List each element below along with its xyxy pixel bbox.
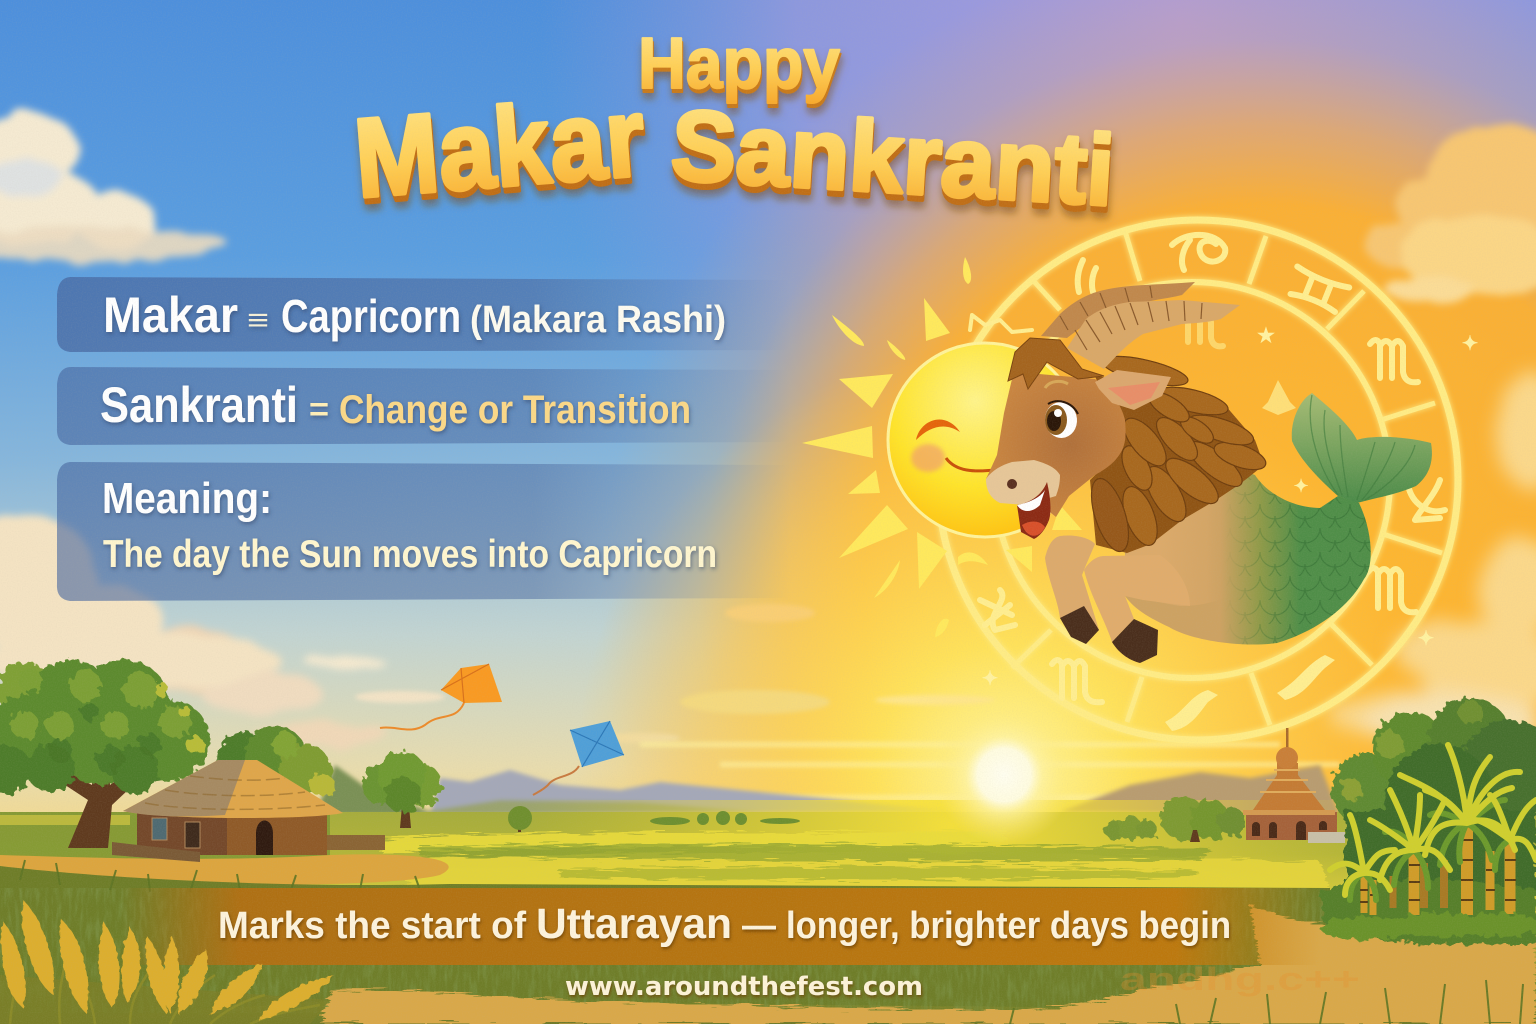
small tree <box>362 751 442 828</box>
title: Makar: Makar <box>350 74 649 221</box>
cane leaves <box>1330 745 1536 895</box>
big tree right <box>1332 698 1536 905</box>
sparkle stars: ★ <box>1257 325 1275 347</box>
panel: Sankranti definition: Change or Transition <box>339 388 691 432</box>
panel: Meaning: Meaning: <box>102 474 272 523</box>
ear <box>1095 370 1171 410</box>
panel: Makar definition: (Makara Rashi) <box>470 299 726 341</box>
clouds: right lower <box>1330 372 1536 746</box>
cheek <box>911 444 945 472</box>
nostril <box>1007 479 1017 489</box>
front leg <box>1084 555 1190 663</box>
kite: orange <box>380 664 502 730</box>
sparkle stars: ✦ <box>1418 628 1434 650</box>
foliage <box>0 660 210 794</box>
panel: Makar definition: Capricorn <box>281 290 461 342</box>
foreground dirt right <box>320 905 1536 1024</box>
zodiac symbols <box>970 235 1445 702</box>
cane joints <box>1360 840 1516 902</box>
sugarcane <box>1320 745 1536 940</box>
banner text: longer, brighter days begin <box>786 905 1231 947</box>
sun on horizon <box>934 705 1074 845</box>
hut fence <box>112 842 200 862</box>
panel: Sankranti definition: = <box>309 391 329 427</box>
panel: Meaning <box>57 462 790 601</box>
cane stalks <box>1364 823 1510 915</box>
dirt path near house <box>0 854 449 885</box>
distant bushes <box>650 811 800 825</box>
banner text: Uttarayan <box>536 900 732 948</box>
sparkle stars: ✦ <box>982 668 998 690</box>
sparkle stars: ✦ <box>1462 333 1478 355</box>
sparkle stars <box>982 325 1478 690</box>
fish tail fin <box>1292 393 1432 503</box>
goat head <box>986 338 1171 539</box>
clouds: left top <box>0 112 230 262</box>
capricorn goat fish <box>986 282 1432 670</box>
hut <box>112 760 385 862</box>
panel: Makar definition: ≡ <box>247 304 269 337</box>
tiny tree <box>508 806 532 832</box>
eye <box>1043 401 1079 439</box>
faint watermark: andhg.c++ <box>1120 961 1360 997</box>
panel: Makar definition: Makar <box>103 287 238 343</box>
temple <box>1243 728 1345 843</box>
title: Sankranti: Sankranti <box>669 95 1118 233</box>
panel: Meaning: The day the Sun moves into Capricorn <box>103 533 717 576</box>
panel: Makar definition <box>57 277 790 352</box>
title <box>350 24 1118 233</box>
grass texture <box>0 888 1340 1013</box>
title: Sankranti: Sankranti <box>668 89 1117 227</box>
grass behind cane <box>1320 878 1536 945</box>
mane <box>1084 350 1269 556</box>
website url: www.aroundthefest.com <box>565 972 923 1002</box>
muzzle <box>986 460 1060 505</box>
bush under cane <box>1320 913 1536 940</box>
clouds: right top <box>1365 125 1536 302</box>
trunk <box>30 745 158 848</box>
grass tufts <box>20 860 1523 1024</box>
clouds: left lower <box>0 515 390 747</box>
sun rays <box>802 257 1082 637</box>
second tree <box>217 725 334 797</box>
smile <box>946 458 995 471</box>
sparkle stars: ✦ <box>1293 476 1309 496</box>
hut windows and door <box>152 818 167 840</box>
clouds: small horizon <box>355 604 995 743</box>
banner text: Marks the start of <box>218 905 526 947</box>
bottom banner <box>120 888 1320 965</box>
sun glow rays on horizon <box>640 742 1340 800</box>
hut walls <box>137 810 327 855</box>
sun disc <box>888 343 1082 537</box>
banner text <box>218 900 1231 948</box>
right tree cluster by temple <box>1105 796 1246 842</box>
back leg <box>1045 535 1099 644</box>
hut roof <box>123 760 343 818</box>
panel: Sankranti definition: Sankranti <box>100 377 298 433</box>
cane dark leaves <box>1350 800 1510 900</box>
mountains <box>315 765 1340 815</box>
foreground grass <box>0 866 1340 1024</box>
horns <box>1041 282 1240 369</box>
sun with face <box>802 257 1082 637</box>
banner text: — <box>742 905 776 947</box>
field <box>0 800 1536 1024</box>
sparkle stars: ✦ <box>1099 599 1111 615</box>
fish body with scales <box>1125 474 1371 644</box>
title: Makar: Makar <box>352 80 651 227</box>
title: Happy: Happy <box>638 24 840 104</box>
winking eye <box>916 420 960 440</box>
zodiac wheel <box>938 220 1458 740</box>
kite: blue <box>533 721 624 795</box>
panel: Sankranti definition <box>57 367 790 445</box>
big tree left <box>0 660 210 848</box>
mouth <box>1017 482 1050 539</box>
goat torso <box>1125 475 1240 606</box>
zodiac filled glyphs <box>1165 380 1335 731</box>
title: Happy: Happy <box>639 28 841 108</box>
wheat foliage bottom left <box>0 903 330 1024</box>
forelock <box>1008 338 1104 389</box>
